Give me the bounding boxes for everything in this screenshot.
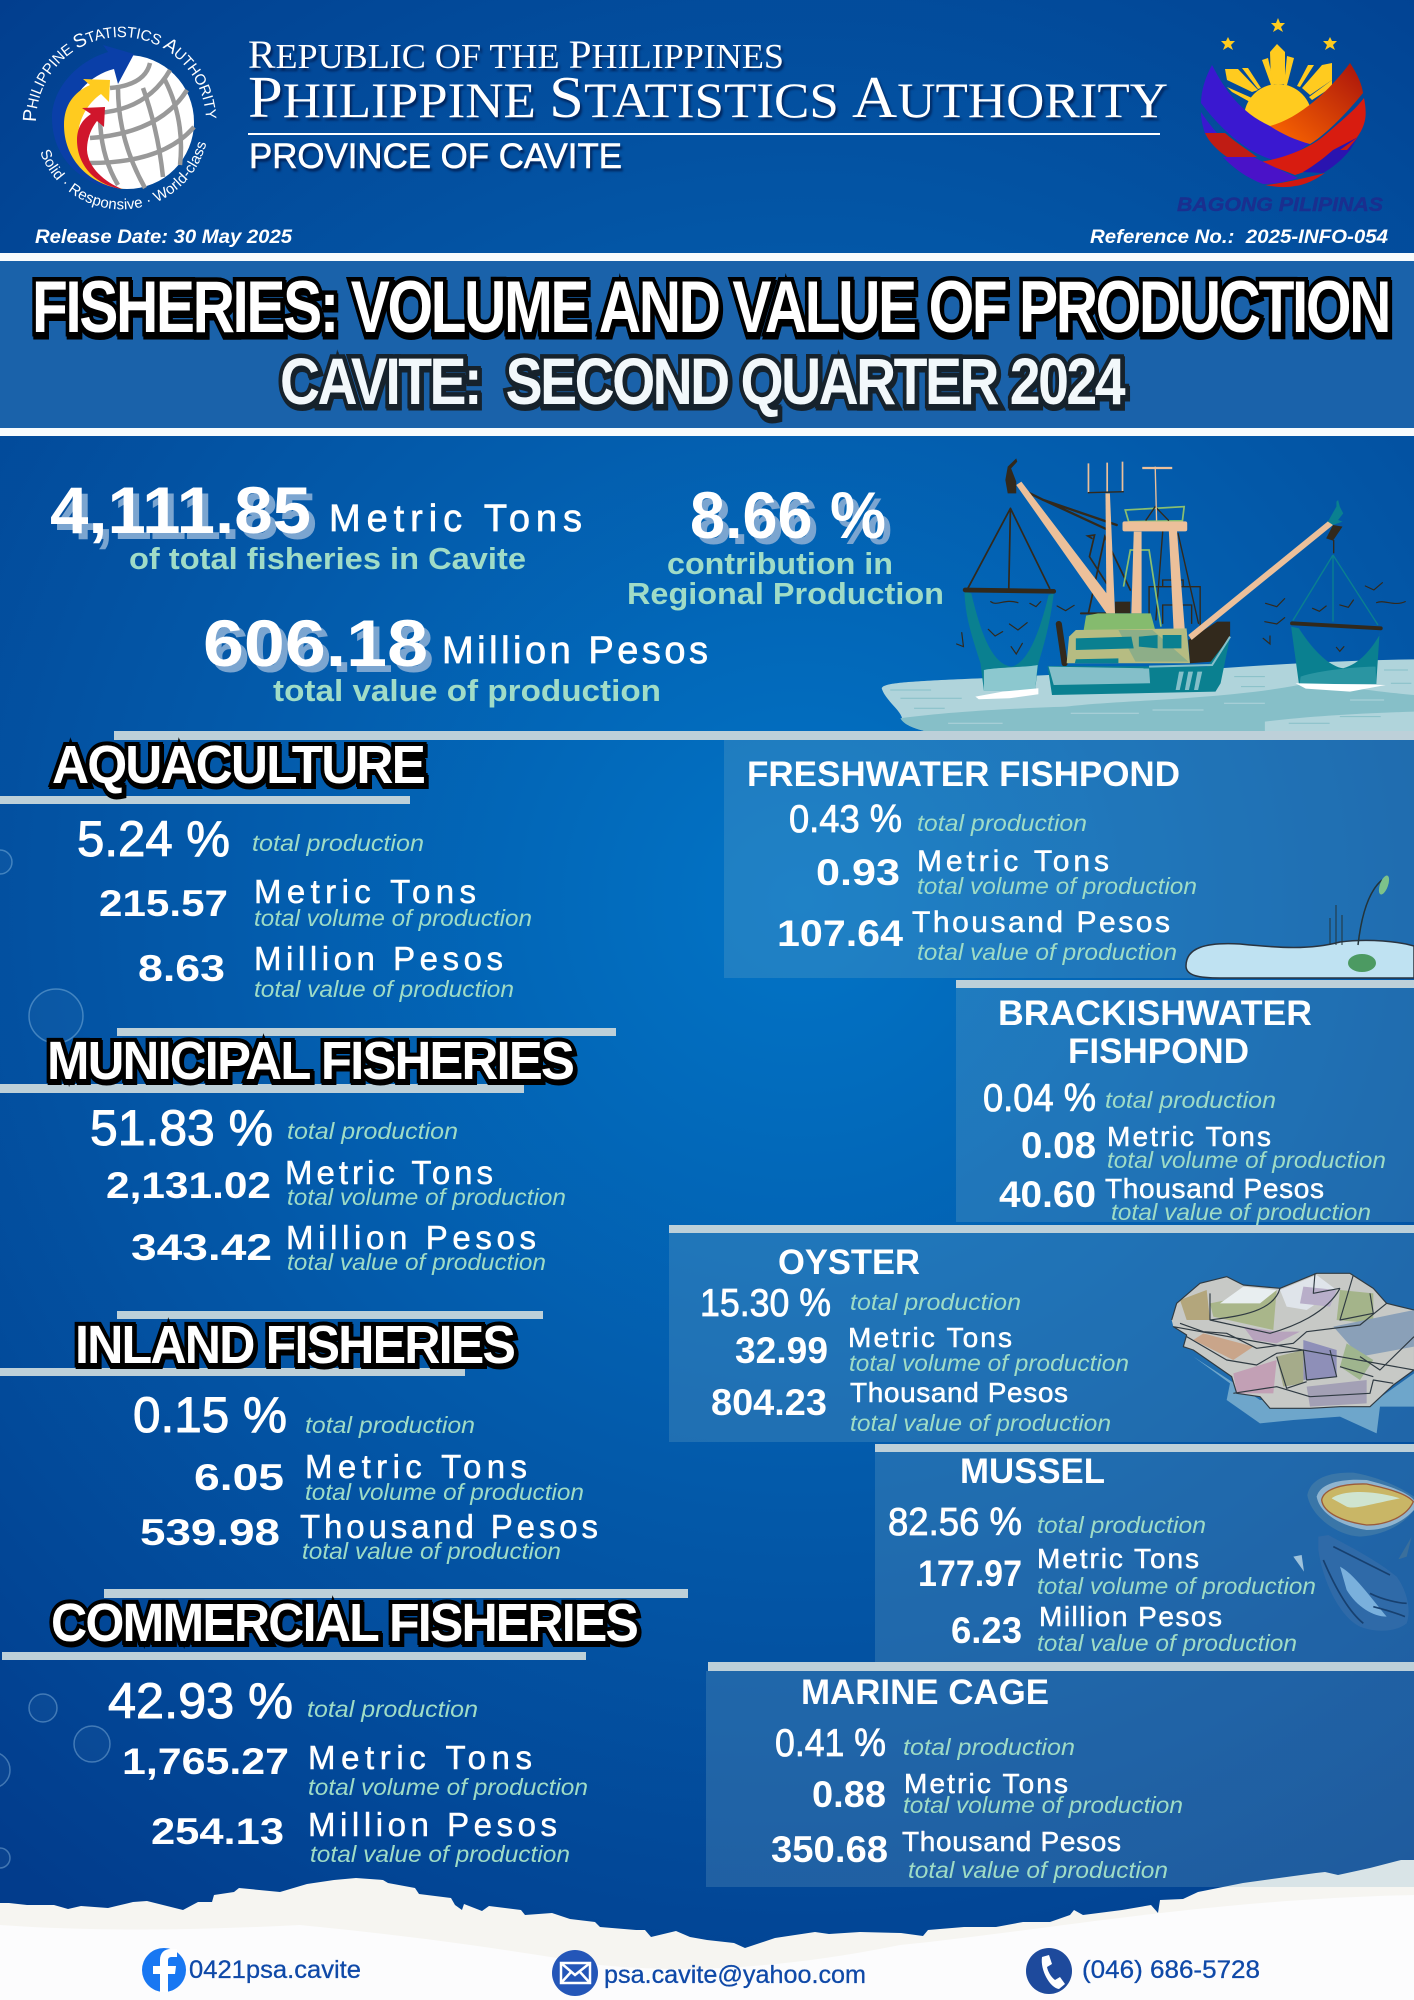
inland percent: 0.15 % — [133, 1387, 287, 1443]
panel: commercial fisheries: Metric Tons — [308, 1739, 532, 1776]
panel: freshwater fishpond: total volume of production — [917, 873, 1197, 899]
reference number: Reference No.: 2025-INFO-054 — [1090, 227, 1388, 248]
marine cage volume: 0.88 — [812, 1774, 886, 1815]
panel: municipal fisheries: total volume of production — [287, 1184, 566, 1210]
panel: municipal fisheries: Metric Tons — [285, 1154, 493, 1191]
inland volume: 6.05 — [194, 1457, 284, 1498]
aquaculture volume: 215.57 — [99, 883, 228, 924]
panel: oyster — [669, 1225, 1414, 1442]
stat: total value — [203, 606, 708, 708]
panel: marine cage: Thousand Pesos — [902, 1826, 1121, 1857]
panel: commercial fisheries: Million Pesos — [308, 1806, 557, 1843]
marine cage percent: 0.41 % — [775, 1722, 886, 1765]
oyster percent: 15.30 % — [700, 1282, 831, 1325]
footer paper — [0, 1860, 1414, 2000]
panel: aquaculture: total volume of production — [254, 905, 532, 931]
panel: mussel: total production — [1037, 1512, 1206, 1538]
panel: marine cage: total production — [903, 1734, 1075, 1760]
brackishwater percent: 0.04 % — [983, 1077, 1096, 1120]
contact: facebook: 0421psa.cavite — [189, 1956, 361, 1984]
stat: total volume: Metric Tons — [329, 498, 582, 540]
heading: freshwater: FRESHWATER FISHPOND — [747, 755, 1180, 794]
panel: brackishwater fishpond: total volume of production — [1107, 1147, 1386, 1173]
municipal value: 343.42 — [131, 1227, 272, 1268]
panel: commercial fisheries — [2, 1589, 688, 1867]
decorative bubbles — [0, 850, 110, 1868]
panel: brackishwater fishpond: Thousand Pesos — [1105, 1173, 1324, 1204]
stat: total volume — [50, 473, 582, 576]
panel: inland fisheries: total volume of production — [305, 1479, 584, 1505]
panel: oyster: Metric Tons — [848, 1322, 1012, 1353]
panel: inland fisheries: total value of production — [302, 1538, 561, 1564]
panel: marine cage: total volume of production — [903, 1792, 1183, 1818]
aquaculture percent: 5.24 % — [77, 811, 230, 867]
panel: aquaculture: total value of production — [254, 976, 514, 1002]
heading: brackishwater: BRACKISHWATER — [998, 994, 1312, 1033]
panel: marine cage — [706, 1662, 1414, 1887]
release date: Release Date: 30 May 2025 — [35, 227, 292, 248]
panel: freshwater fishpond: Metric Tons — [917, 845, 1109, 878]
logo caption: BAGONG PILIPINAS — [1177, 195, 1383, 216]
panel: freshwater fishpond: total production — [917, 810, 1087, 836]
panel: inland fisheries: Thousand Pesos — [300, 1508, 598, 1545]
panel: commercial fisheries: total production — [307, 1696, 478, 1722]
icon: pond — [1186, 874, 1414, 978]
municipal percent: 51.83 % — [90, 1100, 273, 1156]
icon: PSA logo — [22, 26, 216, 210]
subtitle: CAVITE: SECOND QUARTER 2024 — [280, 344, 1126, 418]
commercial volume: 1,765.27 — [122, 1741, 289, 1782]
panel: municipal fisheries: total production — [287, 1118, 458, 1144]
stat: total volume: 4,111.85 — [50, 473, 311, 547]
heading: municipal: MUNICIPAL FISHERIES — [47, 1031, 573, 1091]
panel: commercial fisheries: total volume of production — [308, 1774, 588, 1800]
logo ring text: PHILIPPINE STATISTICS AUTHORITY — [22, 26, 216, 121]
panel: brackishwater fishpond: total value of production — [1111, 1199, 1371, 1225]
panel: brackishwater fishpond: FISHPOND — [1068, 1032, 1249, 1071]
header text: agency name: PHILIPPINE STATISTICS AUTHORITY — [248, 64, 1168, 130]
panel: freshwater fishpond — [724, 740, 1414, 978]
freshwater percent: 0.43 % — [789, 798, 902, 841]
panel: brackishwater fishpond: total production — [1105, 1087, 1276, 1113]
heading: oyster: OYSTER — [778, 1243, 920, 1282]
header text: province: PROVINCE OF CAVITE — [249, 137, 622, 176]
oyster value: 804.23 — [711, 1382, 827, 1423]
panel: key figures — [50, 473, 944, 708]
panel: freshwater fishpond: Thousand Pesos — [912, 906, 1170, 939]
panel: municipal fisheries: total value of production — [287, 1249, 546, 1275]
stat: total value: Million Pesos — [442, 630, 708, 672]
logo motto: Solid · Responsive · World-class — [41, 142, 206, 210]
inland value: 539.98 — [140, 1512, 280, 1553]
icon: Bagong Pilipinas logo — [1177, 18, 1383, 216]
commercial value: 254.13 — [151, 1811, 284, 1852]
header text: republic: REPUBLIC OF THE PHILIPPINES — [248, 32, 784, 77]
panel: mussel: Metric Tons — [1037, 1543, 1199, 1574]
marine cage value: 350.68 — [771, 1829, 888, 1870]
stat: total volume: of total fisheries in Cavite — [129, 541, 526, 576]
header — [22, 18, 1388, 248]
heading: commercial: COMMERCIAL FISHERIES — [51, 1593, 637, 1653]
aquaculture value: 8.63 — [138, 948, 225, 989]
oyster volume: 32.99 — [735, 1330, 828, 1371]
panel: oyster: total value of production — [850, 1410, 1111, 1436]
stat: regional share — [627, 478, 944, 611]
panel: inland fisheries — [0, 1311, 598, 1564]
panel: aquaculture — [0, 731, 1414, 1002]
heading: aquaculture: AQUACULTURE — [52, 735, 424, 795]
title band — [0, 253, 1414, 436]
stat: regional share: Regional Production — [627, 576, 944, 611]
panel: municipal fisheries: Million Pesos — [286, 1219, 536, 1256]
contact: phone: (046) 686-5728 — [1082, 1956, 1260, 1984]
panel: mussel — [875, 1444, 1414, 1662]
panel: mussel: total value of production — [1037, 1630, 1297, 1656]
freshwater value: 107.64 — [777, 913, 903, 954]
panel: oyster: Thousand Pesos — [850, 1377, 1068, 1408]
brackishwater volume: 0.08 — [1021, 1125, 1096, 1166]
panel: freshwater fishpond: total value of production — [917, 939, 1177, 965]
icon: oyster — [1172, 1273, 1414, 1433]
panel: marine cage: total value of production — [908, 1857, 1168, 1883]
panel: municipal fisheries — [0, 1028, 616, 1275]
mussel volume: 177.97 — [918, 1553, 1022, 1594]
panel: brackishwater fishpond: Metric Tons — [1107, 1121, 1271, 1152]
panel: inland fisheries: total production — [305, 1412, 475, 1438]
panel: inland fisheries: Metric Tons — [305, 1448, 527, 1485]
panel: commercial fisheries: total value of production — [310, 1841, 570, 1867]
stat: total value: 606.18 — [203, 606, 428, 680]
heading: inland: INLAND FISHERIES — [75, 1315, 514, 1375]
panel: brackishwater fishpond — [956, 980, 1414, 1225]
mussel percent: 82.56 % — [888, 1501, 1022, 1544]
panel: mussel: total volume of production — [1037, 1573, 1316, 1599]
icon: mussel shells — [1293, 1473, 1414, 1631]
panel: aquaculture: Million Pesos — [254, 940, 503, 977]
panel: aquaculture: total production — [252, 830, 424, 856]
panel: aquaculture: Metric Tons — [254, 873, 476, 910]
mussel value: 6.23 — [951, 1610, 1022, 1651]
contact: facebook — [142, 1948, 361, 1992]
icon: fishing boat illustration — [882, 458, 1414, 731]
panel: oyster: total volume of production — [849, 1350, 1129, 1376]
panel: oyster: total production — [850, 1289, 1021, 1315]
contact: email: psa.cavite@yahoo.com — [604, 1961, 866, 1989]
contact: phone — [1026, 1948, 1260, 1994]
stat: regional share: contribution in — [667, 546, 893, 581]
contact: email — [552, 1950, 866, 1996]
heading: marine cage: MARINE CAGE — [801, 1673, 1049, 1712]
brackishwater value: 40.60 — [999, 1174, 1096, 1215]
footer contacts — [142, 1948, 1260, 1996]
heading: mussel: MUSSEL — [960, 1452, 1105, 1491]
panel: mussel: Million Pesos — [1039, 1601, 1222, 1632]
stat: total value: total value of production — [273, 673, 661, 708]
municipal volume: 2,131.02 — [106, 1165, 271, 1206]
freshwater volume: 0.93 — [816, 852, 900, 893]
commercial percent: 42.93 % — [108, 1673, 293, 1729]
stat: regional share: 8.66 % — [690, 478, 886, 552]
panel: marine cage: Metric Tons — [904, 1768, 1068, 1799]
